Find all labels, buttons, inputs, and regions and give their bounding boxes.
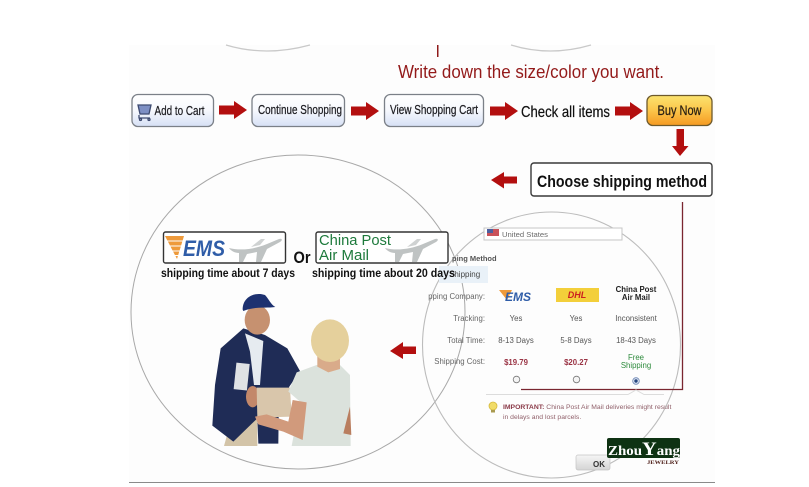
page panel [129, 45, 715, 483]
column: DHL: 5-8 Days [560, 336, 592, 345]
column: EMS [498, 290, 534, 383]
column: EMS: 8-13 Days [498, 336, 534, 345]
arrow left 2 [390, 342, 416, 359]
label: continue shopping: Continue Shopping [258, 102, 342, 117]
courier [212, 294, 300, 446]
important notice [503, 404, 671, 421]
button: view shopping cart [384, 94, 484, 126]
small circle [422, 212, 680, 478]
parcel [257, 388, 292, 418]
vertical connector [521, 202, 682, 390]
icon: cart [138, 105, 151, 120]
OK button [576, 455, 610, 470]
box: choose shipping method [531, 163, 712, 196]
important notice: IMPORTANT: China Post Air Mail deliveries might result [503, 404, 671, 411]
instruction tick [437, 45, 438, 57]
EMS caption: shipping time about 7 days [161, 266, 295, 280]
instruction text: Write down the size/color you want. [398, 62, 664, 82]
arrow down [672, 129, 688, 156]
arrow left [491, 172, 517, 188]
arrow 3 [490, 102, 518, 120]
EMS logo box [164, 232, 286, 263]
country selector [484, 228, 622, 240]
customer [255, 319, 351, 446]
checkout screenshot [428, 228, 671, 470]
check all items: Check all items [521, 104, 610, 121]
button: add to cart [132, 94, 214, 126]
label: choose shipping method: Choose shipping method [537, 172, 707, 191]
photo: courier and customer [212, 294, 351, 446]
column: DHL: Yes [570, 314, 582, 323]
tab: shipping [439, 266, 488, 283]
country selector: United States [502, 230, 548, 239]
column: EMS: EMS [505, 290, 531, 304]
column: China Post [615, 285, 658, 384]
icon: light bulb [489, 402, 497, 412]
row labels: pping Company: [428, 292, 485, 301]
label: add to cart: Add to Cart [154, 103, 205, 118]
column: EMS: Yes [510, 314, 522, 323]
row labels: Shipping Cost: [434, 357, 485, 366]
OK button: OK [593, 460, 605, 469]
row labels [428, 292, 485, 366]
column: China Post: Free [628, 353, 644, 362]
column: China Post: Air Mail [622, 293, 650, 302]
icon: EMS stripes [165, 236, 184, 259]
row labels: Total Time: [447, 336, 485, 345]
arrow 1 [219, 101, 247, 119]
label: view shopping cart: View Shopping Cart [390, 102, 478, 117]
label: China Post Air Mail: Air Mail [319, 247, 369, 264]
column: China Post: 18-43 Days [616, 336, 656, 345]
label: China Post Air Mail: China Post [319, 232, 392, 249]
watermark: ZhouYang Jewelry [607, 438, 680, 466]
top circle remnants [226, 45, 591, 51]
button: continue shopping [252, 94, 344, 126]
column: EMS: $19.79 [504, 358, 529, 367]
button: buy now [647, 96, 712, 126]
column: DHL: DHL [568, 290, 586, 300]
divider with notch [486, 390, 664, 394]
column: DHL: $20.27 [564, 358, 588, 367]
heading: shipping method: ping Method [452, 254, 497, 263]
arrow 4 [615, 102, 643, 120]
important notice: in delays and lost parcels. [503, 414, 581, 421]
column: China Post: Inconsistent [615, 314, 658, 323]
label: buy now: Buy Now [658, 102, 702, 118]
Or: Or [294, 248, 311, 267]
logo text: ZhouYang [608, 439, 680, 460]
tab: shipping: Shipping [449, 270, 480, 279]
row labels: Tracking: [453, 314, 485, 323]
column: China Post: Shipping [621, 361, 651, 370]
big circle [131, 155, 465, 469]
arrow 2 [351, 102, 379, 120]
logo subtext: JEWELRY [647, 460, 679, 466]
column: DHL [556, 288, 599, 383]
icon: plane [385, 239, 438, 262]
column: China Post: China Post [616, 285, 657, 294]
label: EMS: EMS [183, 236, 225, 261]
China Post caption: shipping time about 20 days [312, 266, 455, 280]
China Post box [316, 232, 448, 264]
icon: plane [229, 239, 282, 262]
